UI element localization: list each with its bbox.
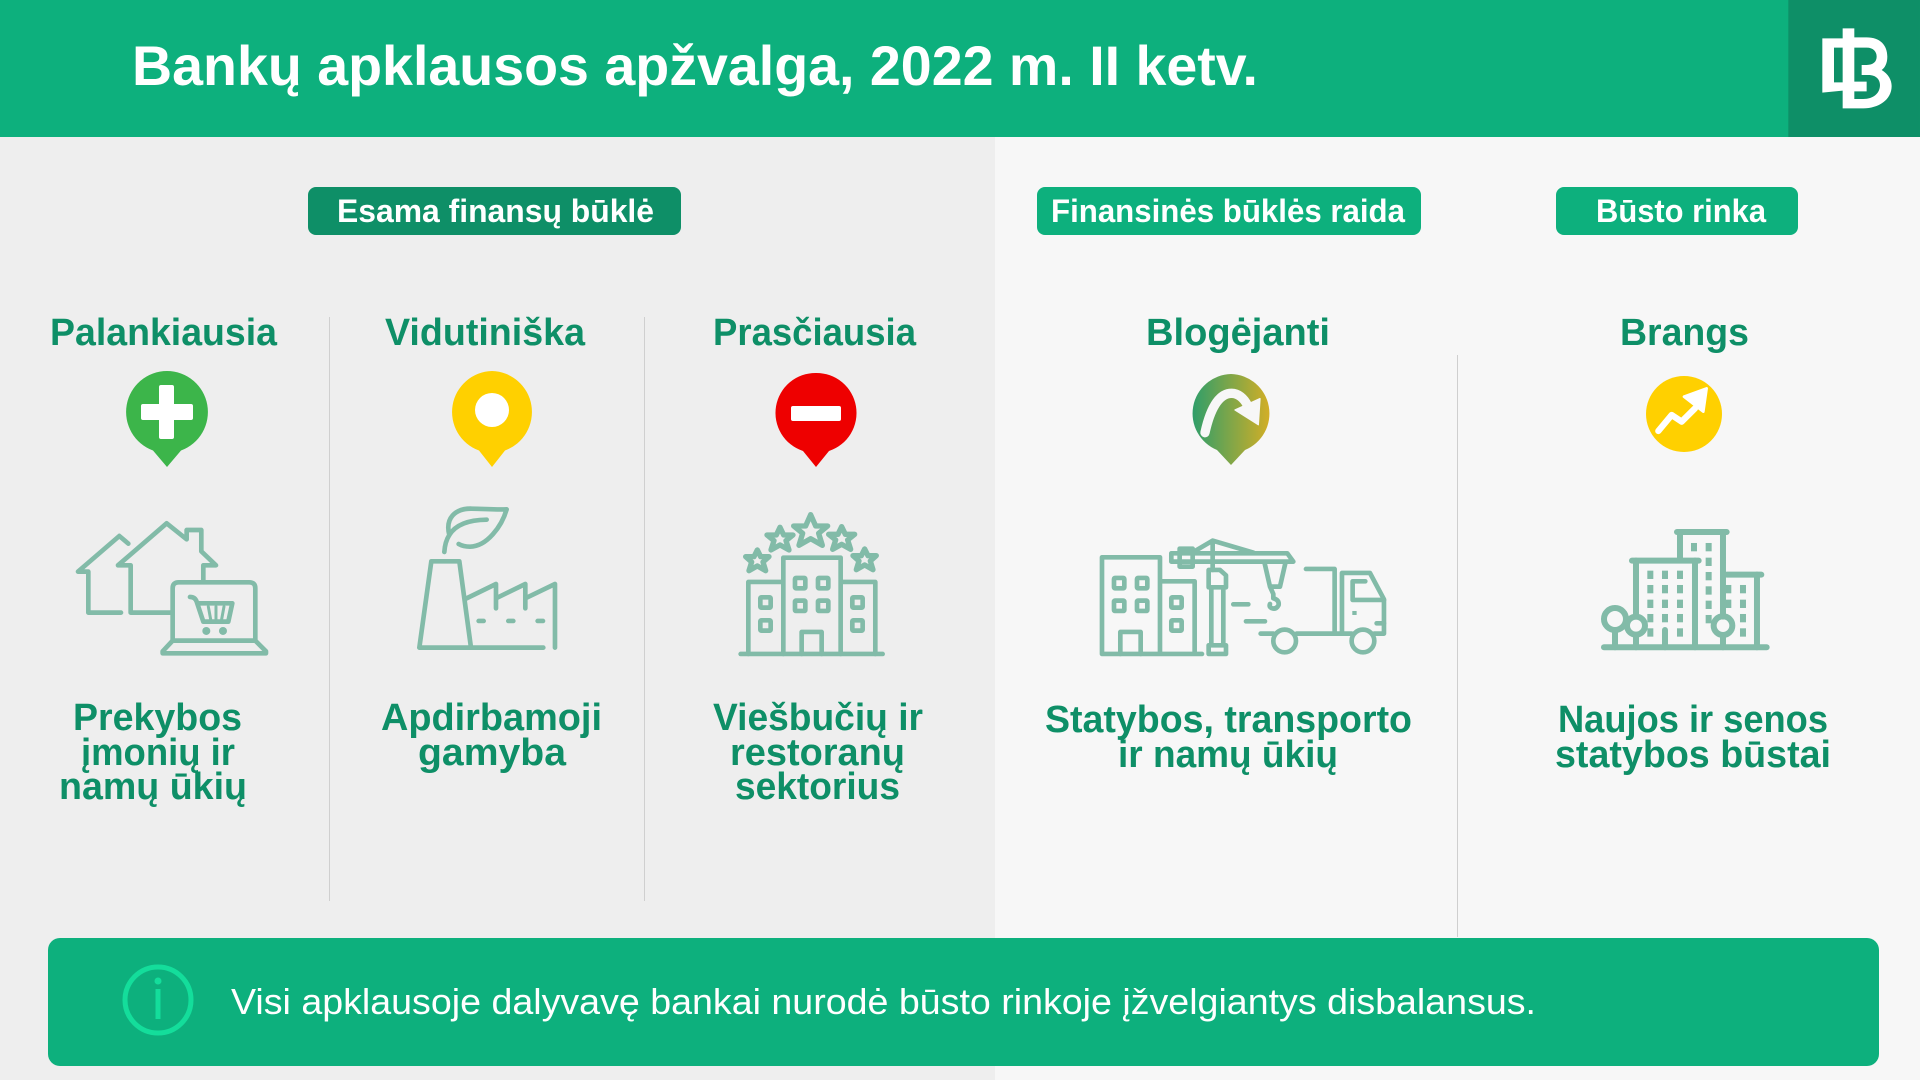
icon: factory with leaf (419, 509, 555, 648)
label: Apdirbamoji gamyba: Apdirbamoji (381, 697, 602, 739)
label: Prekybos įmonių ir namų ūkių: įmonių ir (81, 732, 235, 774)
icon: yellow neutral pin (452, 371, 532, 467)
pill: Būsto rinka: Būsto rinka (1596, 193, 1766, 229)
pill: Esama finansų būklė (308, 187, 681, 235)
panel: current financial state background (0, 137, 995, 1080)
heading: Brangs: Brangs (1620, 312, 1749, 354)
label: Naujos ir senos statybos būstai: statybos būstai (1555, 734, 1831, 776)
icon: red minus pin (775, 373, 857, 467)
icon: building, crane and truck (1102, 541, 1384, 654)
label: Statybos, transporto ir namų ūkių (1045, 699, 1412, 776)
label: Viešbučių ir restoranų sektorius: Viešbučių ir (713, 697, 923, 739)
icon: apartment buildings and trees (1604, 532, 1767, 647)
pill: Finansinės būklės raida: Finansinės būklės raida (1051, 193, 1405, 229)
label: Viešbučių ir restoranų sektorius (713, 697, 923, 808)
header band (0, 0, 1920, 137)
label: Prekybos įmonių ir namų ūkių: Prekybos (73, 697, 242, 739)
icon: yellow rising chart badge (1646, 376, 1722, 452)
panel: development and housing background (995, 137, 1920, 1080)
label: Naujos ir senos statybos būstai (1555, 699, 1831, 776)
icon: houses and online shop (78, 523, 266, 653)
icon: info circle (125, 967, 191, 1033)
heading: Palankiausia: Palankiausia (50, 312, 278, 354)
heading: Vidutiniška: Vidutiniška (385, 312, 586, 354)
label: Statybos, transporto ir namų ūkių: ir namų ūkių (1118, 734, 1338, 776)
icon: hotel with five stars (741, 515, 883, 654)
callout: bottom information bar (48, 938, 1879, 1066)
label: Prekybos įmonių ir namų ūkių (59, 697, 247, 808)
label: Apdirbamoji gamyba (381, 697, 602, 774)
heading: Prasčiausia: Prasčiausia (713, 312, 917, 354)
label: Prekybos įmonių ir namų ūkių: namų ūkių (59, 766, 247, 808)
heading: Blogėjanti: Blogėjanti (1146, 312, 1330, 354)
label: Viešbučių ir restoranų sektorius: restoranų (730, 732, 905, 774)
pill: Būsto rinka (1556, 187, 1798, 235)
label: Statybos, transporto ir namų ūkių: Statybos, transporto (1045, 699, 1412, 741)
label: Viešbučių ir restoranų sektorius: sektorius (735, 766, 900, 808)
pill: Esama finansų būklė: Esama finansų būklė (337, 193, 654, 229)
title: Bankų apklausos apžvalga, 2022 m. II ketv. (132, 34, 1258, 97)
label: Naujos ir senos statybos būstai: Naujos ir senos (1558, 699, 1828, 741)
icon: green plus pin (126, 371, 208, 467)
logo (1788, 0, 1920, 137)
icon: gradient turning arrow pin (1193, 374, 1269, 465)
callout text: Visi apklausoje dalyvavę bankai nurodė būsto rinkoje įžvelgiantys disbalansus. (231, 981, 1536, 1022)
label: Apdirbamoji gamyba: gamyba (418, 732, 567, 774)
